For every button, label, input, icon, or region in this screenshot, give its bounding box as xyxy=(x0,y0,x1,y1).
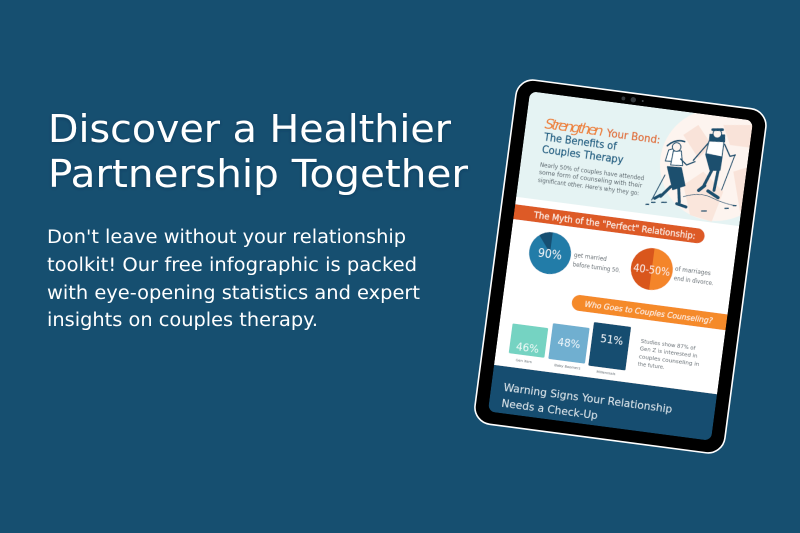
body text: toolkit! Our free infographic is packed xyxy=(47,255,417,276)
body text: insights on couples therapy. xyxy=(47,310,318,331)
body text: with eye-opening statistics and expert xyxy=(47,283,420,304)
bar: Baby Boomers: Baby Boomers xyxy=(554,363,581,371)
text: Gen Z note: the future. xyxy=(637,362,665,371)
illustration: hikers on peach backdrop xyxy=(645,113,752,222)
text: get married xyxy=(573,253,620,272)
text: get married: get married xyxy=(574,252,607,263)
text block: intro xyxy=(538,162,645,198)
tablet screen xyxy=(488,92,752,440)
text: marriages end in divorce: end in divorce. xyxy=(673,275,714,287)
heading: infographic title: Couples Therapy xyxy=(541,144,624,166)
panel: infographic header xyxy=(516,92,752,226)
heading: who goes banner: Who Goes to Couples Counseling? xyxy=(584,300,714,326)
panel: warning signs footer xyxy=(488,365,717,441)
chart: 90% pie xyxy=(528,232,572,274)
text: marriages end in divorce: of marriages xyxy=(675,266,711,277)
tablet mockup xyxy=(473,76,787,457)
heading: myth banner: The Myth of the "Perfect" Relationship: xyxy=(532,211,696,242)
body text: Don't leave without your relationship xyxy=(47,227,406,248)
heading: infographic title: Your Bond: xyxy=(605,127,661,147)
text: Gen Z note xyxy=(638,339,699,369)
panel: warning signs footer: Needs a Check-Up xyxy=(501,398,599,422)
bar: Baby Boomers: 48% xyxy=(557,335,581,351)
text: Gen Z note: Studies show 87% of xyxy=(640,339,697,352)
heading: infographic title xyxy=(542,118,660,166)
bar: Millennials: Millennials xyxy=(596,370,616,376)
body text xyxy=(47,227,420,331)
heading: who goes banner xyxy=(571,294,728,330)
title xyxy=(48,107,468,196)
tablet body xyxy=(473,78,768,455)
text block: intro: Nearly 50% of couples have attended xyxy=(540,162,645,182)
text: Gen Z note: Gen Z is interested in xyxy=(639,346,698,360)
text: marriages end in divorce xyxy=(674,266,713,286)
title: Partnership Together xyxy=(48,152,468,196)
bar: Millennials: 51% xyxy=(600,332,624,348)
bar: Gen Xers xyxy=(508,323,548,366)
text block: intro: significant other. Here's why they go: xyxy=(538,177,640,197)
icon: tablet camera xyxy=(621,96,644,104)
infographic promo canvas xyxy=(48,79,767,454)
chart: 40-50% pie xyxy=(630,248,674,290)
chart: 90% pie: 90% xyxy=(537,246,563,263)
heading: infographic title: The Benefits of xyxy=(542,131,618,153)
title: Discover a Healthier xyxy=(48,107,451,151)
bar: Gen Xers: 46% xyxy=(515,340,540,356)
text: get married: before turning 50. xyxy=(572,261,621,275)
panel: warning signs footer: Warning Signs Your Relationship xyxy=(503,382,673,416)
bar: Baby Boomers xyxy=(547,323,590,371)
text: Gen Z note: couples counseling in xyxy=(638,354,700,368)
text block: intro: some form of counseling with their xyxy=(539,169,643,190)
bar: Gen Xers: Gen Xers xyxy=(515,358,532,364)
bar: Millennials xyxy=(587,322,631,377)
heading: infographic title: Strengthen xyxy=(544,116,604,140)
chart: 40-50% pie: 40-50% xyxy=(633,262,671,279)
